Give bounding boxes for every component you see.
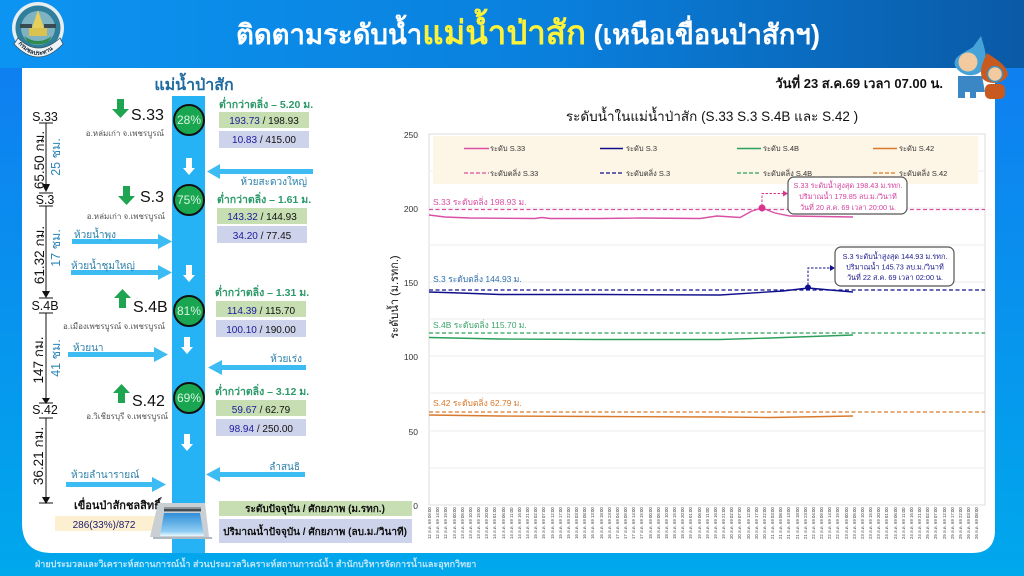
station S.4B (63, 289, 168, 332)
chart legend: ระดับตลิ่ง S.33 (490, 168, 538, 178)
date: วันที่ 23 ส.ค.69 เวลา 07.00 น. (775, 74, 943, 91)
data block S.42: 98.94 / 250.00 (229, 424, 293, 435)
data block S.42 (215, 383, 309, 436)
station S.4B: อ.เมืองเพชรบูรณ์ จ.เพชรบูรณ์ (63, 321, 166, 332)
distance and travel time labels: 25 ชม. (49, 138, 63, 176)
x axis date labels: 25 ส.ค. 69 02:00 (925, 507, 930, 539)
x axis date labels: 24 ส.ค. 69 16:00 (909, 507, 914, 539)
x axis date labels: 24 ส.ค. 69 06:00 (893, 507, 898, 539)
chart legend: ระดับ S.33 (490, 144, 525, 153)
x axis date labels: 18 ส.ค. 69 10:00 (664, 507, 669, 539)
bank level labels: S.3 ระดับตลิ่ง 144.93 ม. (433, 273, 522, 284)
x axis date labels: 13 ส.ค. 69 00:00 (452, 507, 457, 539)
chart legend: ระดับตลิ่ง S.4B (763, 168, 812, 178)
x axis date labels: 15 ส.ค. 69 12:00 (550, 507, 555, 539)
station S.3 (87, 186, 166, 222)
logo: Royal Irrigation Department: กรมชลประทาน (18, 42, 53, 56)
x axis date labels: 21 ส.ค. 69 23:00 (803, 507, 808, 539)
x axis date labels: 20 ส.ค. 69 22:00 (762, 507, 767, 539)
callout S.3 peak: วันที่ 22 ส.ค. 69 เวลา 02:00 น. (847, 272, 943, 282)
key: level: ระดับปัจจุบัน / ศักยภาพ (ม.รทก.) (245, 503, 385, 515)
dam storage value: 286(33%)/872 (73, 520, 136, 531)
x axis date labels: 21 ส.ค. 69 18:00 (795, 507, 800, 539)
data block S.3: 34.20 / 77.45 (233, 231, 292, 242)
x axis date labels: 20 ส.ค. 69 07:00 (737, 507, 742, 539)
distance and travel time labels (31, 131, 63, 485)
percent values: 28% (177, 113, 201, 127)
bank level labels: S.33 ระดับตลิ่ง 198.93 ม. (433, 196, 526, 207)
tributary labels: ห้วยลำนารายณ์ (71, 469, 139, 481)
peak marker S.3 (805, 265, 835, 290)
x axis date labels: 20 ส.ค. 69 12:00 (746, 507, 751, 539)
x axis date labels: 17 ส.ค. 69 19:00 (639, 507, 644, 539)
callout S.3 peak (835, 247, 954, 286)
data block S.4B: 100.10 / 190.00 (226, 325, 296, 336)
y axis labels: 100 (404, 352, 418, 362)
bank level dashed lines (429, 210, 985, 412)
x axis date labels: 23 ส.ค. 69 10:00 (860, 507, 865, 539)
tributary labels: ห้วยเร่ง (270, 353, 302, 365)
key: discharge (219, 519, 412, 543)
x axis date labels: 24 ส.ค. 69 11:00 (901, 507, 906, 539)
callout S.33 peak: ปริมาณน้ำ 179.85 ลบ.ม./วินาที (799, 191, 897, 201)
data block S.3: ต่ำกว่าตลิ่ง – 1.61 ม. (217, 191, 311, 206)
callout S.33 peak: S.33 ระดับน้ำสูงสุด 198.43 ม.รทก. (794, 180, 902, 190)
water level lines (429, 208, 853, 418)
bank level labels: S.42 ระดับตลิ่ง 62.79 ม. (433, 397, 522, 408)
x axis date labels: 21 ส.ค. 69 13:00 (786, 507, 791, 539)
header band (0, 0, 1024, 68)
x axis date labels: 14 ส.ค. 69 11:00 (509, 507, 514, 539)
data block S.42: ต่ำกว่าตลิ่ง – 3.12 ม. (215, 383, 309, 398)
x axis date labels: 22 ส.ค. 69 09:00 (819, 507, 824, 539)
station codes on ruler: S.3 (36, 193, 54, 207)
percent values: 69% (177, 391, 201, 405)
tributary labels: ลำสนธิ (269, 462, 300, 473)
dam name: เขื่อนป่าสักชลสิทธิ์ (74, 497, 162, 512)
x axis date labels: 19 ส.ค. 69 16:00 (713, 507, 718, 539)
callout S.33 peak: วันที่ 20 ส.ค. 69 เวลา 20:00 น. (800, 202, 896, 212)
station S.4B: S.4B (133, 299, 168, 316)
x axis date labels: 24 ส.ค. 69 21:00 (917, 507, 922, 539)
footer credit: ฝ่ายประมวลและวิเคราะห์สถานการณ์น้ำ ส่วนประมวลวิเคราะห์สถานการณ์น้ำ สำนักบริหารจัดการน้ำและอุทกวิทยา (35, 557, 476, 570)
x axis date labels: 16 ส.ค. 69 23:00 (607, 507, 612, 539)
distance and travel time labels: 17 ชม. (49, 229, 63, 267)
y axis labels: 200 (404, 204, 418, 214)
x axis date labels: 19 ส.ค. 69 01:00 (688, 507, 693, 539)
bank level labels: S.4B ระดับตลิ่ง 115.70 ม. (433, 319, 527, 330)
x axis date labels: 23 ส.ค. 69 20:00 (876, 507, 881, 539)
data block S.33 (219, 96, 313, 148)
station codes on ruler (31, 110, 59, 417)
x axis date labels: 21 ส.ค. 69 08:00 (778, 507, 783, 539)
tributary labels: ห้วยน้ำพุง (74, 227, 116, 241)
x axis date labels: 17 ส.ค. 69 14:00 (631, 507, 636, 539)
x axis date labels: 23 ส.ค. 69 15:00 (868, 507, 873, 539)
dam storage value (55, 516, 155, 531)
tributary arrows (66, 164, 313, 492)
chart legend: ระดับ S.4B (763, 144, 799, 153)
tributary labels: ห้วยน้ำชุมใหญ่ (71, 258, 135, 272)
percent values: 75% (177, 193, 201, 207)
x axis date labels: 14 ส.ค. 69 21:00 (525, 507, 530, 539)
percent badges (174, 105, 204, 413)
distance ruler (39, 123, 53, 503)
x axis date labels: 20 ส.ค. 69 17:00 (754, 507, 759, 539)
x axis date labels: 26 ส.ค. 69 08:00 (974, 507, 979, 539)
station S.3: อ.หล่มเก่า จ.เพชรบูรณ์ (87, 211, 166, 222)
distance and travel time labels: 41 ชม. (49, 339, 63, 377)
tributary labels: ห้วยสะดวงใหญ่ (240, 176, 307, 188)
x axis date labels: 18 ส.ค. 69 00:00 (648, 507, 653, 539)
chart legend: ระดับตลิ่ง S.3 (626, 168, 670, 178)
bank level labels (433, 196, 527, 408)
data block S.3 (217, 191, 311, 243)
icon: dam (150, 503, 212, 538)
station S.42: S.42 (132, 393, 165, 410)
x axis date labels: 14 ส.ค. 69 01:00 (492, 507, 497, 539)
x axis date labels (427, 507, 979, 539)
chart legend: ระดับ S.42 (899, 144, 934, 153)
x axis date labels: 12 ส.ค. 69 19:00 (443, 507, 448, 539)
y axis labels: 50 (409, 427, 418, 437)
distance and travel time labels: 61.32 กม. (32, 226, 47, 284)
white flow arrows (181, 158, 195, 451)
x axis date labels: 19 ส.ค. 69 11:00 (705, 507, 710, 539)
peak marker S.33 (758, 190, 788, 212)
x axis date labels: 25 ส.ค. 69 17:00 (950, 507, 955, 539)
x axis date labels: 15 ส.ค. 69 17:00 (558, 507, 563, 539)
x axis date labels: 17 ส.ค. 69 09:00 (623, 507, 628, 539)
station S.42: อ.วิเชียรบุรี จ.เพชรบูรณ์ (86, 411, 169, 422)
tributary labels: ห้วยนา (73, 342, 104, 354)
x axis date labels: 14 ส.ค. 69 16:00 (517, 507, 522, 539)
x axis date labels: 25 ส.ค. 69 07:00 (933, 507, 938, 539)
y axis labels: 0 (413, 501, 418, 511)
key: level (219, 501, 412, 516)
station S.42 (86, 384, 169, 422)
x axis date labels: 25 ส.ค. 69 22:00 (958, 507, 963, 539)
y axis labels (404, 130, 418, 511)
chart legend (433, 136, 978, 184)
data block S.4B: ต่ำกว่าตลิ่ง – 1.31 ม. (215, 284, 309, 299)
river channel (172, 96, 205, 553)
x axis date labels: 12 ส.ค. 69 14:00 (435, 507, 440, 539)
river name heading: แม่น้ำป่าสัก (154, 72, 234, 94)
station S.33: S.33 (131, 107, 164, 124)
station S.33 (86, 99, 165, 139)
chart title: ระดับน้ำในแม่น้ำป่าสัก (S.33 S.3 S.4B และ S.42 ) (566, 106, 858, 124)
x axis date labels: 12 ส.ค. 69 09:00 (427, 507, 432, 539)
callout S.33 peak (788, 177, 907, 214)
station codes on ruler: S.42 (32, 403, 58, 417)
data block S.33: 193.73 / 198.93 (229, 116, 299, 127)
x axis date labels: 19 ส.ค. 69 21:00 (721, 507, 726, 539)
x axis date labels: 24 ส.ค. 69 01:00 (884, 507, 889, 539)
data block S.4B: 114.39 / 115.70 (227, 306, 295, 317)
x axis date labels: 16 ส.ค. 69 13:00 (590, 507, 595, 539)
callout S.3 peak: S.3 ระดับน้ำสูงสุด 144.93 ม.รทก. (843, 251, 947, 261)
x axis date labels: 15 ส.ค. 69 07:00 (541, 507, 546, 539)
distance and travel time labels: 147 กม. (31, 336, 46, 384)
percent values (177, 113, 201, 405)
station codes on ruler: S.4B (31, 299, 59, 313)
x axis date labels: 16 ส.ค. 69 03:00 (574, 507, 579, 539)
logo: Royal Irrigation Department (12, 2, 64, 58)
x axis date labels: 13 ส.ค. 69 20:00 (484, 507, 489, 539)
x axis date labels: 20 ส.ค. 69 02:00 (729, 507, 734, 539)
x axis date labels: 17 ส.ค. 69 04:00 (615, 507, 620, 539)
data block S.4B (215, 284, 309, 337)
station S.3: S.3 (140, 189, 164, 206)
percent values: 81% (177, 304, 201, 318)
data block S.33: ต่ำกว่าตลิ่ง – 5.20 ม. (219, 96, 313, 111)
y axis title: ระดับน้ำ (ม.รทก.) (386, 255, 401, 339)
x axis date labels: 22 ส.ค. 69 04:00 (811, 507, 816, 539)
station S.33: อ.หล่มเก่า จ.เพชรบูรณ์ (86, 128, 165, 139)
y axis labels: 150 (404, 278, 418, 288)
x axis date labels: 13 ส.ค. 69 15:00 (476, 507, 481, 539)
x axis date labels: 22 ส.ค. 69 14:00 (827, 507, 832, 539)
callout S.3 peak: ปริมาณน้ำ 145.73 ลบ.ม./วินาที (846, 262, 944, 272)
x axis date labels: 25 ส.ค. 69 12:00 (942, 507, 947, 539)
x axis date labels: 18 ส.ค. 69 05:00 (656, 507, 661, 539)
line chart (386, 130, 985, 539)
tributary labels (71, 176, 307, 481)
x axis date labels: 23 ส.ค. 69 05:00 (852, 507, 857, 539)
key: discharge: ปริมาณน้ำปัจจุบัน / ศักยภาพ (ลบ.ม./วินาที) (223, 524, 407, 538)
x axis date labels: 14 ส.ค. 69 06:00 (501, 507, 506, 539)
x axis date labels: 22 ส.ค. 69 19:00 (835, 507, 840, 539)
x axis date labels: 15 ส.ค. 69 02:00 (533, 507, 538, 539)
x axis date labels: 23 ส.ค. 69 00:00 (844, 507, 849, 539)
y axis labels: 250 (404, 130, 418, 140)
station codes on ruler: S.33 (32, 110, 58, 124)
x axis date labels: 13 ส.ค. 69 05:00 (460, 507, 465, 539)
data block S.42: 59.67 / 62.79 (232, 405, 291, 416)
title: ติดตามระดับน้ำแม่น้ำป่าสัก (เหนือเขื่อนป่าสักฯ) (236, 8, 820, 51)
distance and travel time labels: 65.50 กม. (32, 131, 47, 189)
x axis date labels: 21 ส.ค. 69 03:00 (770, 507, 775, 539)
x axis date labels: 13 ส.ค. 69 10:00 (468, 507, 473, 539)
x axis date labels: 16 ส.ค. 69 08:00 (582, 507, 587, 539)
mascots (955, 36, 1008, 99)
x axis date labels: 15 ส.ค. 69 22:00 (566, 507, 571, 539)
data block S.33: 10.83 / 415.00 (232, 135, 296, 146)
data block S.3: 143.32 / 144.93 (227, 212, 297, 223)
chart legend: ระดับตลิ่ง S.42 (899, 168, 947, 178)
distance and travel time labels: 36.21 กม. (31, 427, 46, 485)
x axis date labels: 16 ส.ค. 69 18:00 (599, 507, 604, 539)
x axis date labels: 18 ส.ค. 69 15:00 (672, 507, 677, 539)
x axis date labels: 26 ส.ค. 69 03:00 (966, 507, 971, 539)
x axis date labels: 18 ส.ค. 69 20:00 (680, 507, 685, 539)
x axis date labels: 19 ส.ค. 69 06:00 (697, 507, 702, 539)
chart legend: ระดับ S.3 (626, 144, 657, 153)
